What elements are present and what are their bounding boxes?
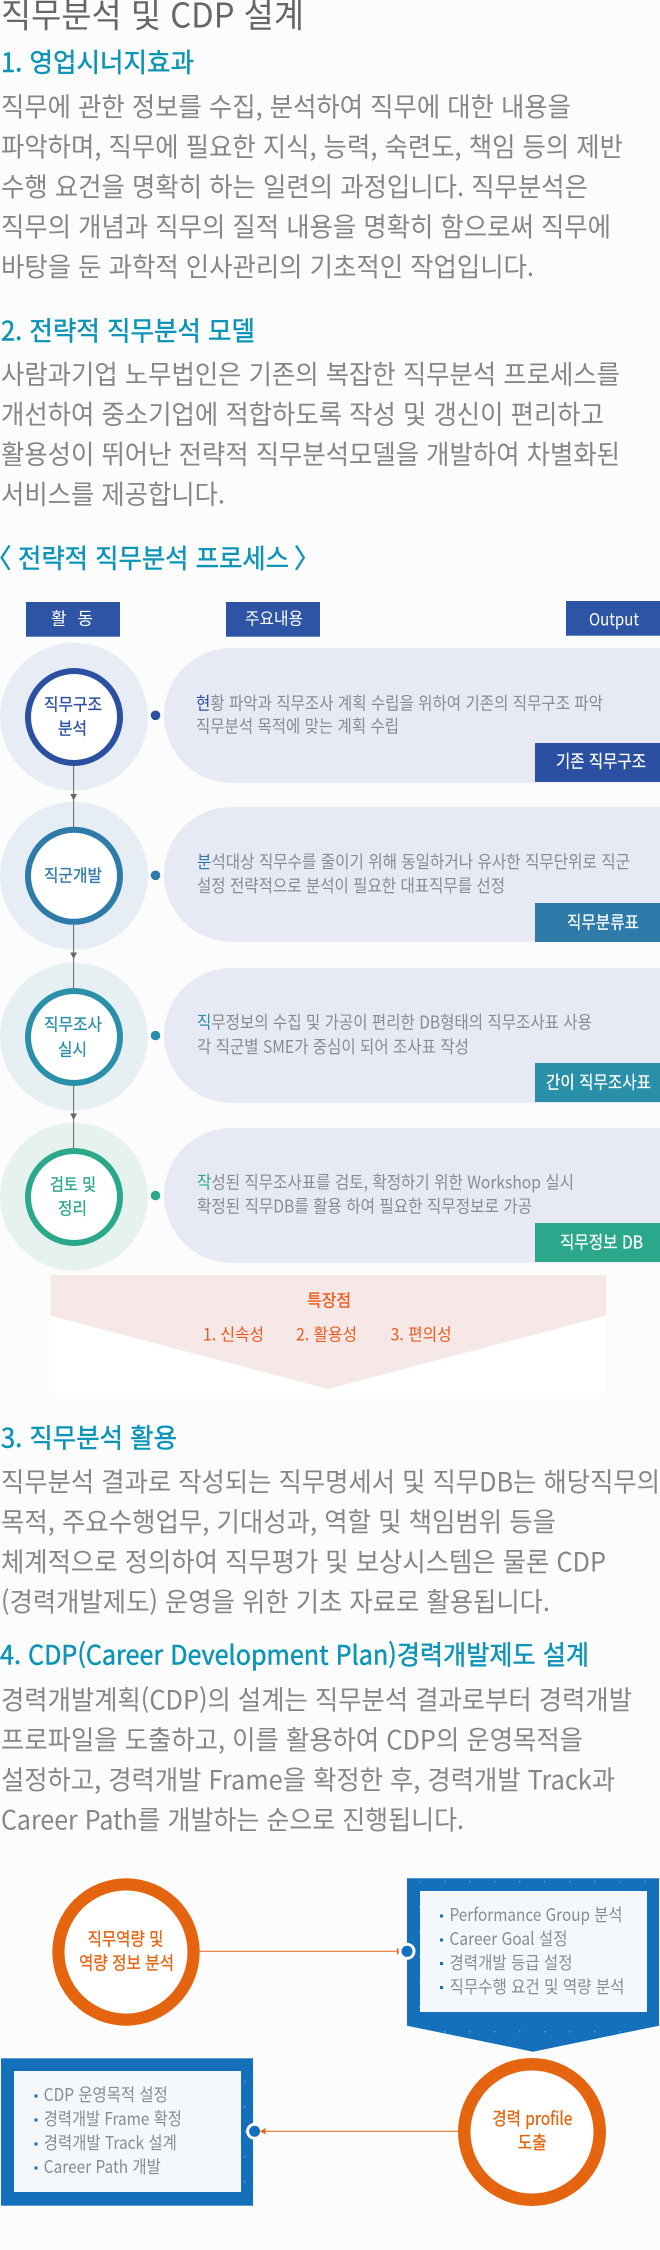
content panel 2: 설정 전략적으로 분석이 필요한 대표직무를 선정: [197, 873, 505, 898]
process heading: 전략적 직무분석 프로세스: [18, 537, 289, 576]
panel: CDP box: [1, 2058, 263, 2206]
activity circle 1: [0, 643, 148, 791]
row 3: job survey: [0, 963, 660, 1111]
arrow: row 1 to row 2: [70, 766, 77, 827]
section 1 heading: 1. 영업시너지효과: [1, 41, 194, 80]
output box 2: [535, 903, 660, 942]
arrow: profile circle to CDP box: [260, 2128, 459, 2135]
bullet dot: [151, 1191, 160, 1200]
column header: activity: 활 동: [51, 605, 93, 630]
panel: CDP box: 경력개발 Frame 확정: [44, 2106, 182, 2131]
activity circle 3: 직무조사: [44, 1010, 102, 1035]
panel: career goal box: Performance Group 분석: [450, 1902, 622, 1927]
section 1 text block: 수행 요건을 명확히 하는 일련의 과정입니다. 직무분석은: [1, 165, 588, 204]
section 2 text block: 개선하여 중소기업에 적합하도록 작성 및 갱신이 편리하고: [1, 393, 604, 432]
activity circle 4: [0, 1123, 148, 1271]
circle: career profile: 도출: [518, 2129, 547, 2155]
row 4: review and arrangement: [0, 1123, 660, 1271]
output box 4: [535, 1223, 660, 1262]
content panel 1: 직무분석 목적에 맞는 계획 수립: [196, 714, 399, 739]
arrow: row 3 to row 4: [70, 1086, 77, 1148]
column header: main content: [226, 602, 320, 637]
column header: main content: 주요내용: [245, 605, 303, 630]
section 1 text block: [1, 85, 623, 284]
arrow: row 2 to row 3: [70, 925, 77, 988]
circle: career profile: [458, 2058, 606, 2206]
section 2 text block: 사람과기업 노무법인은 기존의 복잡한 직무분석 프로세스를: [1, 353, 620, 392]
row 2: job family development: [0, 802, 660, 950]
panel: career goal box: 직무수행 요건 및 역량 분석: [450, 1974, 624, 1999]
output box 4: 직무정보 DB: [560, 1230, 643, 1255]
section 3 text block: 목적, 주요수행업무, 기대성과, 역할 및 책임범위 등을: [1, 1500, 556, 1539]
output box 1: 기존 직무구조: [556, 749, 646, 774]
content panel 4: [164, 1128, 660, 1263]
section 4 text block: 프로파일을 도출하고, 이를 활용하여 CDP의 운영목적을: [1, 1719, 583, 1758]
content panel 3: 직무정보의 수집 및 가공이 편리한 DB형태의 직무조사표 사용: [197, 1010, 592, 1035]
section 4 text block: Career Path를 개발하는 순으로 진행됩니다.: [1, 1799, 464, 1838]
content panel 1: [164, 648, 660, 783]
circle: career profile: 경력 profile: [492, 2105, 572, 2131]
circle: competency analysis: [52, 1878, 200, 2026]
section 4 text block: [1, 1679, 632, 1838]
section 2 text block: 서비스를 제공합니다.: [1, 473, 225, 512]
output box 1: [535, 743, 660, 782]
content panel 4: 확정된 직무DB를 활용 하여 필요한 직무정보로 가공: [197, 1194, 532, 1219]
section 2 text block: 활용성이 뛰어난 전략적 직무분석모델을 개발하여 차별화된: [1, 433, 620, 472]
section 4 text block: 설정하고, 경력개발 Frame을 확정한 후, 경력개발 Track과: [1, 1759, 615, 1798]
output box 3: [535, 1063, 660, 1102]
column header: activity: [26, 602, 120, 637]
features callout: 3. 편의성: [391, 1320, 452, 1345]
content panel 3: 각 직군별 SME가 중심이 되어 조사표 작성: [197, 1034, 469, 1059]
section 4 text block: 경력개발계획(CDP)의 설계는 직무분석 결과로부터 경력개발: [1, 1679, 632, 1718]
section 4 heading: 4. CDP(Career Development Plan)경력개발제도 설계: [0, 1634, 589, 1673]
circle: competency analysis: 역량 정보 분석: [79, 1950, 174, 1976]
panel: career goal box: 경력개발 등급 설정: [450, 1950, 572, 1975]
bullet dot: [151, 710, 160, 720]
section 3 text block: 체계적으로 정의하여 직무평가 및 보상시스템은 물론 CDP: [1, 1540, 606, 1579]
panel: CDP box: 경력개발 Track 설계: [44, 2130, 177, 2155]
panel: career goal box: Career Goal 설정: [450, 1926, 568, 1951]
section 2 heading: 2. 전략적 직무분석 모델: [1, 309, 255, 348]
output box 2: 직무분류표: [567, 910, 639, 935]
content panel 1: 현황 파악과 직무조사 계획 수립을 위하여 기존의 직무구조 파악: [196, 690, 603, 715]
process heading: 〉: [294, 537, 320, 576]
content panel 4: 작성된 직무조사표를 검토, 확정하기 위한 Workshop 실시: [197, 1170, 574, 1195]
bullet dot: [151, 1031, 160, 1040]
bullet dot: [151, 870, 160, 880]
section 3 text block: (경력개발제도) 운영을 위한 기초 자료로 활용됩니다.: [1, 1580, 550, 1619]
section 3 heading: 3. 직무분석 활용: [1, 1416, 177, 1455]
content panel 3: [164, 968, 660, 1103]
activity circle 4: 정리: [58, 1195, 87, 1220]
activity circle 1: 분석: [58, 715, 87, 740]
circle: competency analysis: 직무역량 및: [88, 1925, 164, 1951]
arrow: competency circle to box: [199, 1948, 402, 1955]
activity circle 3: 실시: [58, 1035, 87, 1060]
features callout: 특장점: [307, 1287, 351, 1312]
column header: output: Output: [589, 605, 640, 630]
activity circle 3: [0, 963, 148, 1111]
activity circle 2: [0, 802, 148, 950]
features callout: [50, 1275, 606, 1394]
features callout: 1. 신속성: [203, 1320, 264, 1345]
column header: output: [566, 601, 660, 636]
activity circle 1: 직무구조: [44, 690, 102, 715]
section 1 text block: 파악하며, 직무에 필요한 지식, 능력, 숙련도, 책임 등의 제반: [1, 125, 623, 164]
row 1: job structure analysis: [0, 643, 660, 791]
section 2 text block: [1, 353, 620, 512]
section 1 text block: 직무의 개념과 직무의 질적 내용을 명확히 함으로써 직무에: [1, 205, 611, 244]
content panel 2: [164, 807, 660, 942]
section 1 text block: 바탕을 둔 과학적 인사관리의 기초적인 작업입니다.: [1, 245, 534, 284]
section 3 text block: [1, 1460, 660, 1619]
section 1 text block: 직무에 관한 정보를 수집, 분석하여 직무에 대한 내용을: [1, 85, 571, 124]
panel: career goal box: [398, 1878, 659, 2052]
activity circle 2: 직군개발: [44, 862, 102, 887]
features callout: 2. 활용성: [296, 1320, 357, 1345]
activity circle 4: 검토 및: [50, 1170, 96, 1195]
panel: CDP box: CDP 운영목적 설정: [44, 2082, 168, 2107]
panel: CDP box: Career Path 개발: [44, 2154, 161, 2179]
